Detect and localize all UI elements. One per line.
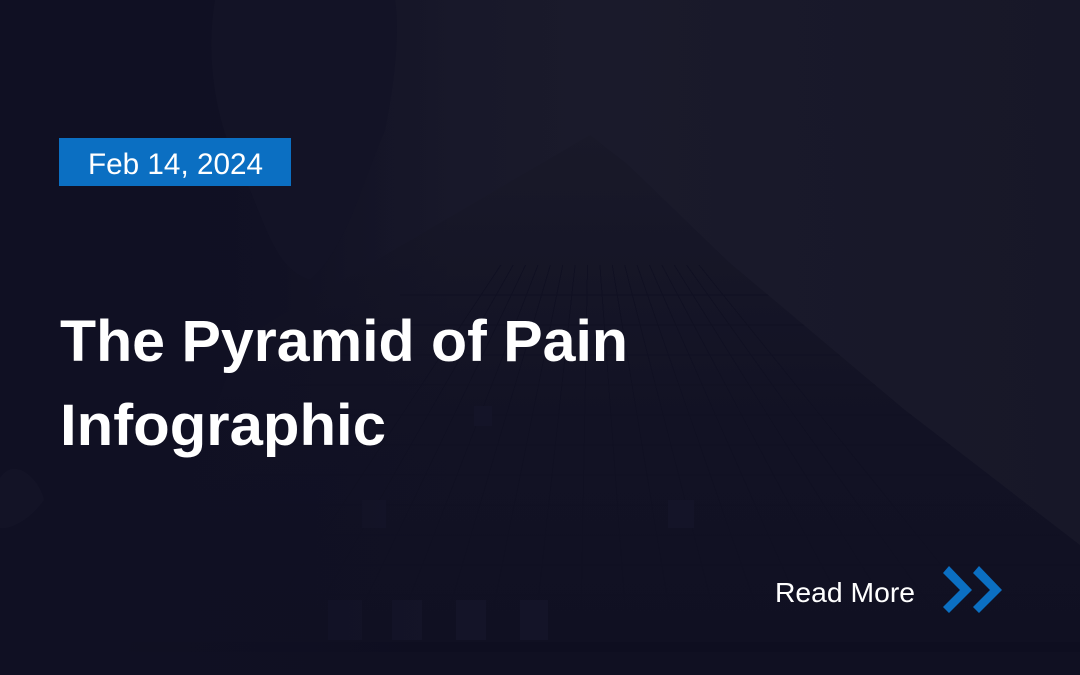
date badge: Feb 14, 2024 [88,148,263,181]
icon: double chevron arrow [943,566,1002,613]
title: The Pyramid of Pain [60,309,628,374]
title [60,309,628,458]
tree foliage at top left [0,0,397,528]
background: dark building photo [420,0,1076,540]
title: Infographic [60,393,386,458]
date badge [59,138,291,186]
pyramid building silhouette [411,265,1080,675]
read more label: Read More [775,577,915,608]
lighter window cells [328,406,694,640]
